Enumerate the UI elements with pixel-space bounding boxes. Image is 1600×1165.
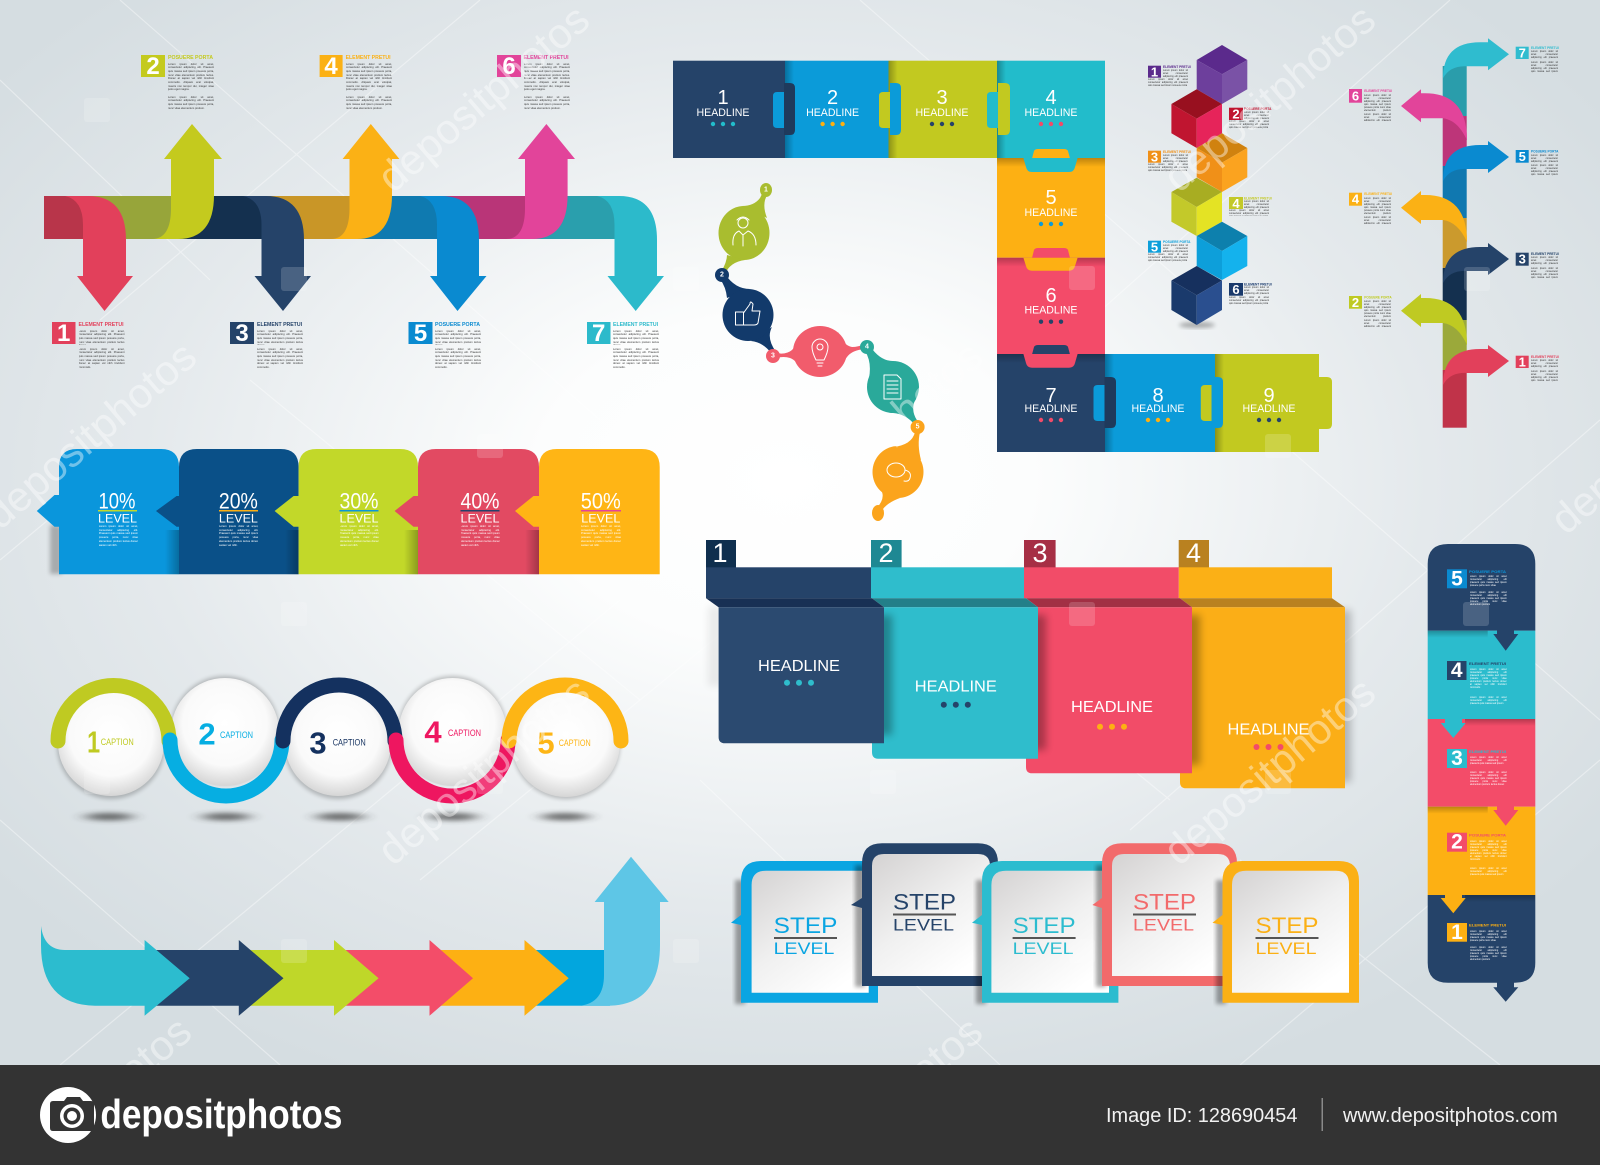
tab 9 text: [1242, 385, 1296, 422]
caption 5: 5: [537, 726, 555, 760]
stack label 3: ELEMENT PRETUI: [1469, 749, 1506, 754]
column 2 teal: 2: [878, 538, 894, 568]
panel: step level cards: [731, 843, 1359, 1004]
tab 2 text: HEADLINE: [806, 107, 859, 119]
stack label 4: [1447, 659, 1507, 707]
caption 5: [537, 726, 591, 760]
stack label 5: POSUERE PORTA: [1469, 569, 1506, 574]
icon: light bulb: [812, 339, 828, 366]
label 7: ELEMENT PRETUI: [1531, 46, 1559, 50]
watermark text: depositphotos: [368, 668, 598, 874]
label 4: Lorem ipsum dolor sit amet, consectetur adipiscing elit. Praesent quis massa sed ipsum posuere porta, nunc vitae elementum pretium.: [346, 96, 392, 110]
level tab 50 percent: [515, 449, 660, 574]
droplet 1 lime person: [718, 183, 772, 274]
arrow 7 right: [1443, 38, 1509, 78]
stack label 1: [1447, 921, 1507, 962]
label 4: Lorem ipsum dolor sit amet, consectetur adipiscing elit. Praesent quis massa sed ipsum posuere porta, nunc vitae elementum pretium lectus. Donec at sapien vel nibh tincidunt commodo. Aliquam erat volutpat, mauris non tempor dui, integer vitae justo eget magna.: [346, 62, 392, 91]
label 1: ELEMENT PRETUI: [78, 322, 124, 328]
arrow 3 down: [243, 196, 311, 311]
caption 2: 2: [198, 716, 216, 752]
amber chevron arrow: [440, 940, 569, 1016]
stack label 1: ELEMENT PRETUI: [1469, 922, 1506, 928]
ground shadows: [85, 813, 589, 821]
label 3: ELEMENT PRETUI: [257, 322, 302, 328]
stack label 3: Lorem ipsum dolor sit amet consectetur adipiscing elit praesent quis massa sed ipsum posuere porta nunc vitae elementum pretium lectus donec: [1470, 771, 1507, 786]
upward arrow: [580, 857, 669, 1006]
circle shadows: [57, 676, 620, 799]
cube 6 navy: [1171, 266, 1222, 325]
droplet 5 orange speech: [872, 420, 925, 521]
panel: four folded headline columns: [706, 538, 1351, 788]
level tab 10 percent: LEVEL: [98, 512, 137, 526]
stack label 5: 5: [1451, 568, 1463, 590]
caption 2: CAPTION: [220, 730, 253, 740]
tab 8 text: HEADLINE: [1132, 403, 1184, 415]
cube 2 red: [1171, 89, 1222, 148]
level tab 20 percent: [156, 449, 299, 574]
tab 3 text: HEADLINE: [916, 107, 968, 119]
column 4 amber: HEADLINE: [1228, 722, 1310, 738]
arrow 4 left: [1401, 191, 1467, 242]
tab 4 text: [1024, 87, 1078, 126]
label 4: [320, 53, 392, 110]
stack label 5: Lorem ipsum dolor sit amet consectetur adipiscing elit praesent quis massa sed ipsum posuere porta nunc vitae elementum pretium: [1470, 591, 1507, 606]
tab 8 text: 8: [1152, 385, 1164, 407]
tab 3 text: [916, 87, 968, 126]
tab 5 text: HEADLINE: [1024, 207, 1078, 219]
step card 1 blue: LEVEL: [774, 939, 834, 958]
ribbon back segments: [44, 196, 617, 239]
label 3: [1516, 252, 1559, 279]
shadow under level tabs: [50, 525, 62, 574]
column 1 navy: 1: [712, 538, 728, 568]
level tab 50 percent: Lorem ipsum dolor sit amet, consectetur adipiscing elit. Praesent quis massa sed ipsum posuere porta, nunc vitae elementum pretium lectus donec sapien vel nibh.: [581, 525, 621, 546]
label 2: 2: [1352, 295, 1359, 310]
label 6: Lorem ipsum dolor sit amet, consectetur adipiscing elit. Praesent quis massa sed ipsum posuere porta, nunc vitae elementum pretium lectus. Donec at sapien vel nibh tincidunt commodo. Aliquam erat volutpat, mauris non tempor dui, integer vitae justo eget magna.: [524, 62, 570, 91]
vertical ribbon back segments: [1443, 66, 1467, 428]
caption 4: CAPTION: [448, 728, 481, 738]
droplet 1 lime person: 1: [764, 186, 768, 194]
cube label 4: [1229, 196, 1272, 216]
cube 1 purple: [1197, 45, 1247, 104]
cube label 6: ELEMENT PRETUI: [1244, 282, 1272, 286]
stack label 1: Lorem ipsum dolor sit amet consectetur adipiscing elit praesent quis massa sed ipsum posuere porta nunc vitae: [1470, 930, 1507, 942]
circles: [58, 678, 620, 797]
icon: speech bubbles: [887, 463, 910, 481]
column 3 red: HEADLINE: [1071, 699, 1153, 716]
stack label 4: 4: [1451, 659, 1463, 682]
red chevron arrow: [345, 940, 473, 1016]
step card 4 coral: LEVEL: [1133, 916, 1194, 934]
tab 6 text: HEADLINE: [1024, 305, 1078, 317]
droplet 2 navy thumbs up: [715, 268, 776, 354]
navy chevron arrow: [155, 940, 284, 1016]
cube label 2: 2: [1232, 106, 1240, 122]
level tab 30 percent: [275, 449, 418, 574]
cube label 5: [1148, 240, 1191, 263]
cube label 3: 3: [1151, 150, 1158, 164]
label 6: ELEMENT PRETUI: [1364, 89, 1392, 93]
droplet 4 teal document: [860, 340, 919, 425]
lime chevron arrow: [250, 940, 379, 1016]
tab 7 text: HEADLINE: [1024, 403, 1078, 415]
cube label 2: Lorem ipsum dolor sit amet consectetur adipiscing elit praesent quis massa sed ipsum posuere porta: [1229, 120, 1269, 129]
arrow 1 down: [65, 196, 133, 311]
level tab 40 percent: 40%: [460, 488, 500, 514]
label 2: [1349, 295, 1392, 327]
label 2: Lorem ipsum dolor sit amet, consectetur adipiscing elit. Praesent quis massa sed ipsum posuere porta, nunc vitae elementum pretium lectus. Donec at sapien vel nibh tincidunt commodo. Aliquam erat volutpat, mauris non tempor dui, integer vitae justo eget magna.: [168, 62, 214, 91]
label 1: [1516, 354, 1559, 382]
cube 3 orange: [1197, 133, 1247, 192]
droplet 5 orange speech: 5: [916, 424, 920, 430]
caption 5: CAPTION: [559, 738, 591, 748]
label 4: ELEMENT PRETUI: [1364, 192, 1392, 196]
website url: www.depositphotos.com: [1342, 1105, 1558, 1127]
label 5: POSUERE PORTA: [435, 322, 480, 328]
label 1: ELEMENT PRETUI: [1531, 355, 1559, 359]
vertical connector tabs: [1023, 149, 1078, 368]
label 4: 4: [324, 53, 338, 80]
label 6: Lorem ipsum dolor sit amet, consectetur adipiscing elit. Praesent quis massa sed ipsum posuere porta, nunc vitae elementum pretium.: [524, 96, 570, 110]
step card 2 navy: [851, 843, 998, 987]
column 3 red: 3: [1032, 538, 1048, 568]
label 6: ELEMENT PRETUI: [524, 55, 569, 61]
watermark text: depositphotos: [1154, 668, 1384, 874]
step card 3 teal: STEP: [1013, 913, 1076, 938]
panel: stacked cubes: [1148, 45, 1272, 328]
level tab 40 percent: Lorem ipsum dolor sit amet, consectetur adipiscing elit. Praesent quis massa sed ipsum posuere porta, nunc vitae elementum pretium lectus donec sapien vel nibh.: [460, 525, 500, 546]
label 5: [408, 320, 481, 368]
watermark text: depositphotos: [761, 332, 991, 538]
label 7: 7: [592, 320, 605, 347]
stack label 4: Lorem ipsum dolor sit amet consectetur adipiscing elit praesent quis massa sed ipsum posuere porta nunc vitae elementum pretium lectus donec at sapien vel nibh tincidunt commodo: [1470, 668, 1507, 689]
cube label 1: [1148, 64, 1191, 86]
tab 9 text: 9: [1263, 385, 1275, 407]
stack label 2: POSUERE PORTA: [1469, 832, 1506, 838]
label 3: 3: [235, 320, 249, 347]
label 4: ELEMENT PRETUI: [346, 55, 391, 61]
step card 5 amber: [1212, 861, 1359, 1004]
level tab 30 percent: LEVEL: [340, 512, 379, 526]
horizontal connector tabs: [773, 83, 1223, 428]
caption 3: 3: [309, 726, 327, 760]
label 2: [141, 53, 214, 110]
cube label 3: ELEMENT PRETUI: [1163, 150, 1191, 154]
panel: droplet chain with icons: [715, 183, 925, 521]
cube label 6: Lorem ipsum dolor sit amet consectetur adipiscing elit praesent quis massa sed ipsum posuere porta: [1229, 296, 1269, 305]
level tab 20 percent: 20%: [219, 488, 258, 514]
level tab 40 percent: LEVEL: [460, 512, 500, 526]
label 4: [1349, 192, 1392, 224]
cube label 1: ELEMENT PRETUI: [1163, 65, 1191, 69]
tab 8 text: [1132, 385, 1184, 422]
level tab 10 percent: [37, 449, 179, 574]
panel: vertical stacked steps: [1428, 544, 1535, 1002]
vertical stack segments: [1428, 544, 1535, 983]
tab 7 text: [1024, 385, 1078, 422]
cube 4 lime: [1171, 178, 1222, 236]
step card 4 coral: STEP: [1133, 890, 1196, 914]
cube label 3: [1148, 150, 1191, 173]
cube label 5: POSUERE PORTA: [1163, 240, 1191, 244]
cube label 1: 1: [1151, 64, 1158, 80]
level tab 30 percent: Lorem ipsum dolor sit amet, consectetur adipiscing elit. Praesent quis massa sed ipsum posuere porta, nunc vitae elementum pretium lectus donec sapien vel nibh.: [340, 525, 379, 546]
droplet 4 teal document: 4: [865, 344, 869, 350]
caption 1: [87, 724, 134, 760]
label 5: 5: [1519, 149, 1526, 164]
cube label 5: Lorem ipsum dolor sit amet consectetur adipiscing elit praesent quis massa sed ipsum posuere porta: [1148, 253, 1188, 262]
label 7: [587, 320, 659, 368]
stack label 3: Lorem ipsum dolor sit amet consectetur adipiscing elit praesent quis massa sed ipsum: [1470, 756, 1507, 765]
cube 5 blue: [1197, 222, 1247, 280]
step card 3 teal: LEVEL: [1013, 939, 1074, 958]
stack label 3: [1447, 747, 1507, 789]
step card 5 amber: LEVEL: [1256, 939, 1316, 958]
panel: horizontal ribbon timeline with seven arrows: [44, 53, 664, 368]
cube shadow: [1179, 322, 1215, 328]
caption 4: [424, 714, 481, 750]
footer banner: [0, 1065, 1600, 1165]
column 2 teal: [871, 538, 1046, 759]
column 1 navy: HEADLINE: [758, 658, 840, 675]
arrow 5 right: [1443, 141, 1509, 181]
step card 1 blue: STEP: [774, 913, 837, 938]
column 1 navy: [706, 538, 892, 743]
label 6: [497, 53, 570, 110]
watermark text: depositphotos: [368, 0, 598, 201]
cube label 5: 5: [1151, 240, 1158, 254]
panel: linked circles with captions: [57, 676, 621, 821]
watermark text: depositphotos: [1154, 0, 1384, 201]
panel: chained arrow with upward turn: [41, 857, 669, 1016]
label 2: POSUERE PORTA: [1364, 296, 1392, 300]
cube label 2: [1229, 106, 1272, 130]
label 7: [1516, 46, 1559, 73]
stack label 3: 3: [1451, 747, 1463, 770]
label 6: 6: [1352, 88, 1359, 104]
divider: [1322, 1098, 1323, 1131]
label 1: 1: [57, 320, 70, 347]
tab panels: [673, 61, 1332, 452]
tab 6 text: 6: [1045, 285, 1057, 307]
panel: vertical ribbon timeline: [1349, 38, 1559, 428]
cube label 6: [1229, 282, 1272, 306]
tab 4 text: 4: [1045, 87, 1057, 109]
stack label 4: Lorem ipsum dolor sit amet consectetur adipiscing elit praesent quis massa sed ipsum: [1470, 696, 1507, 705]
step card 5 amber: STEP: [1256, 913, 1318, 938]
teal starting arrow: [41, 926, 190, 1016]
tab 2 text: 2: [827, 87, 838, 109]
label 7: ELEMENT PRETUI: [613, 322, 658, 328]
cube label 4: ELEMENT PRETUI: [1244, 196, 1272, 200]
label 2: Lorem ipsum dolor sit amet, consectetur adipiscing elit. Praesent quis massa sed ipsum posuere porta, nunc vitae elementum pretium.: [168, 96, 214, 110]
stack label 5: Lorem ipsum dolor sit amet consectetur adipiscing elit praesent quis massa sed ipsum posuere porta nunc vitae: [1470, 575, 1507, 587]
blue bar: [530, 950, 610, 1006]
label 5: [1516, 149, 1559, 176]
tab 2 text: [806, 87, 859, 126]
arrow 2 up: [152, 124, 222, 239]
label 7: 7: [1519, 46, 1526, 60]
label 1: 1: [1519, 354, 1526, 370]
arrow 6 up: [506, 124, 575, 239]
tab 5 text: 5: [1045, 187, 1057, 209]
step card 4 coral: [1092, 843, 1237, 987]
logo wordmark: depositphotos: [100, 1091, 342, 1137]
cube label 3: Lorem ipsum dolor sit amet consectetur adipiscing elit praesent quis massa sed ipsum posuere porta: [1148, 163, 1188, 172]
droplet 2 navy thumbs up: 2: [720, 272, 724, 278]
label 6: [1349, 88, 1392, 121]
caption 1: CAPTION: [101, 737, 134, 747]
label 5: 5: [414, 320, 427, 347]
label 3: [230, 320, 303, 368]
stack label 2: Lorem ipsum dolor sit amet consectetur adipiscing elit praesent quis massa sed ipsum posuere porta nunc vitae elementum pretium lectus donec at sapien vel nibh tincidunt commodo: [1470, 840, 1507, 861]
step card 1 blue: [731, 861, 878, 1004]
column 2 teal: HEADLINE: [915, 678, 997, 696]
step card 2 navy: LEVEL: [893, 916, 954, 934]
label 4: 4: [1352, 192, 1360, 206]
column 4 amber: [1179, 538, 1351, 788]
label 6: 6: [502, 53, 516, 80]
label 1: [52, 320, 124, 368]
step card 3 teal: [972, 861, 1118, 1004]
cube label 4: 4: [1232, 196, 1240, 211]
step card 2 navy: STEP: [893, 890, 956, 914]
stack label 2: 2: [1451, 830, 1463, 854]
arrow 3 right: [1443, 243, 1509, 283]
column 4 amber: 4: [1186, 538, 1201, 568]
tab 4 text: HEADLINE: [1024, 107, 1078, 119]
tab 5 text: [1024, 187, 1078, 226]
arrow 6 left: [1401, 89, 1467, 140]
tab 1 text: 1: [717, 87, 729, 109]
label 2: 2: [146, 53, 160, 80]
tab 9 text: HEADLINE: [1242, 403, 1296, 415]
arrow 7 down: [597, 196, 664, 311]
icon: thumbs up: [736, 302, 760, 325]
stack label 1: 1: [1451, 921, 1463, 944]
tab 6 text: [1024, 285, 1078, 324]
tab 1 text: HEADLINE: [696, 107, 750, 119]
tab 1 text: [696, 87, 750, 126]
stack arrows: [1441, 630, 1518, 1002]
watermark camera marks: [84, 98, 1490, 963]
stack label 2: Lorem ipsum dolor sit amet consectetur adipiscing elit praesent quis massa sed ipsum: [1470, 867, 1507, 876]
level tab 10 percent: 10%: [98, 488, 136, 514]
icon: depositphotos camera logo: [40, 1087, 96, 1143]
caption 3: CAPTION: [333, 738, 366, 748]
level tab 30 percent: 30%: [340, 488, 378, 514]
icon: document: [884, 375, 901, 399]
caption 3: [309, 726, 366, 760]
tab 7 text: 7: [1045, 385, 1057, 407]
arrow 1 right: [1443, 345, 1509, 385]
panel: numbered tabs path 1 to 9: [673, 61, 1332, 452]
column 3 red: [1024, 538, 1200, 773]
level tab 50 percent: LEVEL: [581, 512, 621, 526]
caption 4: 4: [424, 714, 442, 750]
level tab 50 percent: 50%: [581, 488, 621, 514]
stack label 4: ELEMENT PRETUI: [1469, 661, 1506, 666]
droplet 3 red light bulb: 3: [771, 352, 775, 360]
level tab 40 percent: [395, 449, 539, 574]
arrow 2 left: [1401, 294, 1467, 345]
level tab 10 percent: Lorem ipsum dolor sit amet, consectetur adipiscing elit. Praesent quis massa sed ipsum posuere porta, nunc vitae elementum pretium lectus donec sapien vel nibh.: [99, 525, 138, 546]
label 3: ELEMENT PRETUI: [1531, 252, 1559, 256]
stack label 1: Lorem ipsum dolor sit amet consectetur adipiscing elit praesent quis massa sed ipsum posuere porta nunc vitae elementum pretium: [1470, 946, 1507, 961]
label 2: POSUERE PORTA: [168, 55, 213, 61]
arrow 4 up: [331, 124, 399, 239]
caption 1: 1: [87, 724, 100, 760]
panel: percent level tabs: [37, 449, 660, 574]
tab 3 text: 3: [936, 87, 948, 109]
stack label 5: [1447, 568, 1507, 607]
cube label 2: POSUERE PORTA: [1244, 107, 1272, 111]
level tab 20 percent: LEVEL: [219, 512, 258, 526]
arrow 5 down: [420, 196, 486, 311]
caption 2: [198, 716, 253, 752]
icon: person: [733, 217, 756, 246]
ribbon arcs: [58, 685, 621, 796]
cube label 6: 6: [1232, 282, 1240, 297]
level tab 20 percent: Lorem ipsum dolor sit amet, consectetur adipiscing elit. Praesent quis massa sed ipsum posuere porta, nunc vitae elementum pretium lectus donec sapien vel nibh.: [219, 525, 258, 546]
image id: Image ID: 128690454: [1106, 1105, 1297, 1127]
droplet 3 red light bulb: [766, 326, 865, 377]
stack label 2: [1447, 830, 1507, 878]
label 5: POSUERE PORTA: [1531, 150, 1559, 154]
label 3: 3: [1519, 252, 1526, 266]
